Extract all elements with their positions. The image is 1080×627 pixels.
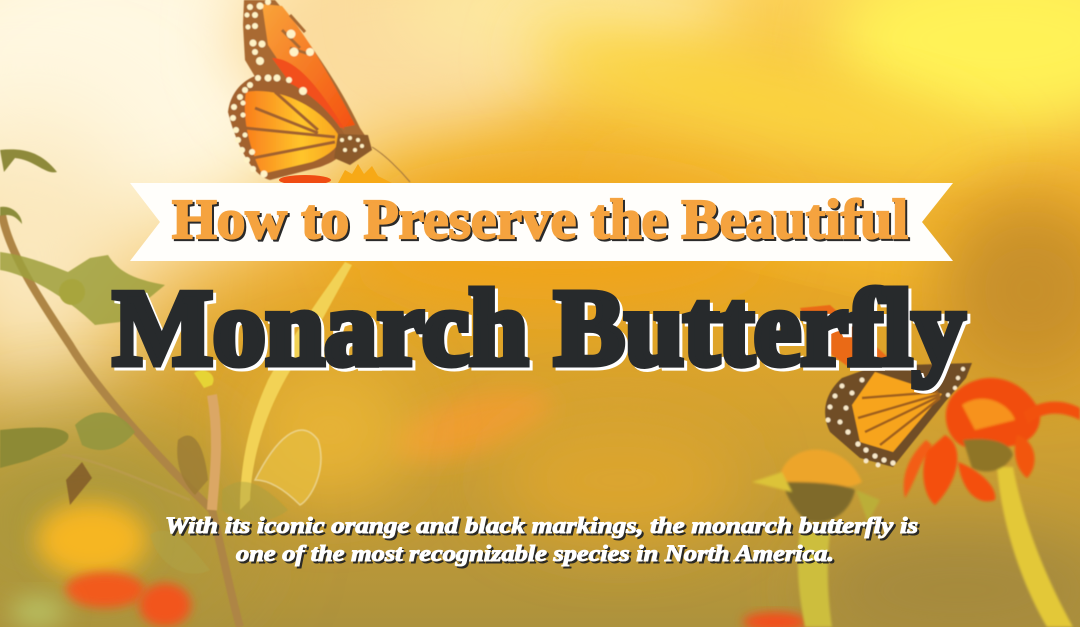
blurred foreground flowers bottom left	[10, 502, 807, 627]
flower under upper butterfly	[279, 164, 392, 185]
banner ribbon with heading	[130, 183, 953, 261]
forewing	[243, 0, 368, 140]
main title: Monarch Butterfly: Monarch Butterfly	[113, 269, 965, 388]
heading: How to Preserve the Beautiful: How to Preserve the Beautiful	[172, 189, 908, 251]
subtitle text: one of the most recognizable species in North America.	[236, 541, 834, 566]
subtitle text: With its iconic orange and black markings, the monarch butterfly is	[165, 513, 918, 538]
main title: Monarch Butterfly: Monarch Butterfly	[116, 272, 968, 391]
subtitle text: With its iconic orange and black markings, the monarch butterfly is	[167, 515, 920, 540]
spots along wing edge	[230, 0, 314, 178]
orange flower lower right	[904, 378, 1080, 627]
subtitle text	[165, 513, 920, 568]
yellow flower bottom centre right	[752, 450, 880, 627]
subtitle text: one of the most recognizable species in North America.	[238, 543, 836, 568]
plant stems and leaves on the left	[0, 149, 352, 627]
heading: How to Preserve the Beautiful: How to Preserve the Beautiful	[174, 191, 910, 253]
icon: monarch butterfly, upper	[228, 0, 410, 182]
icon: monarch butterfly, lower	[800, 305, 972, 468]
body	[334, 134, 372, 165]
hindwing	[228, 76, 346, 180]
